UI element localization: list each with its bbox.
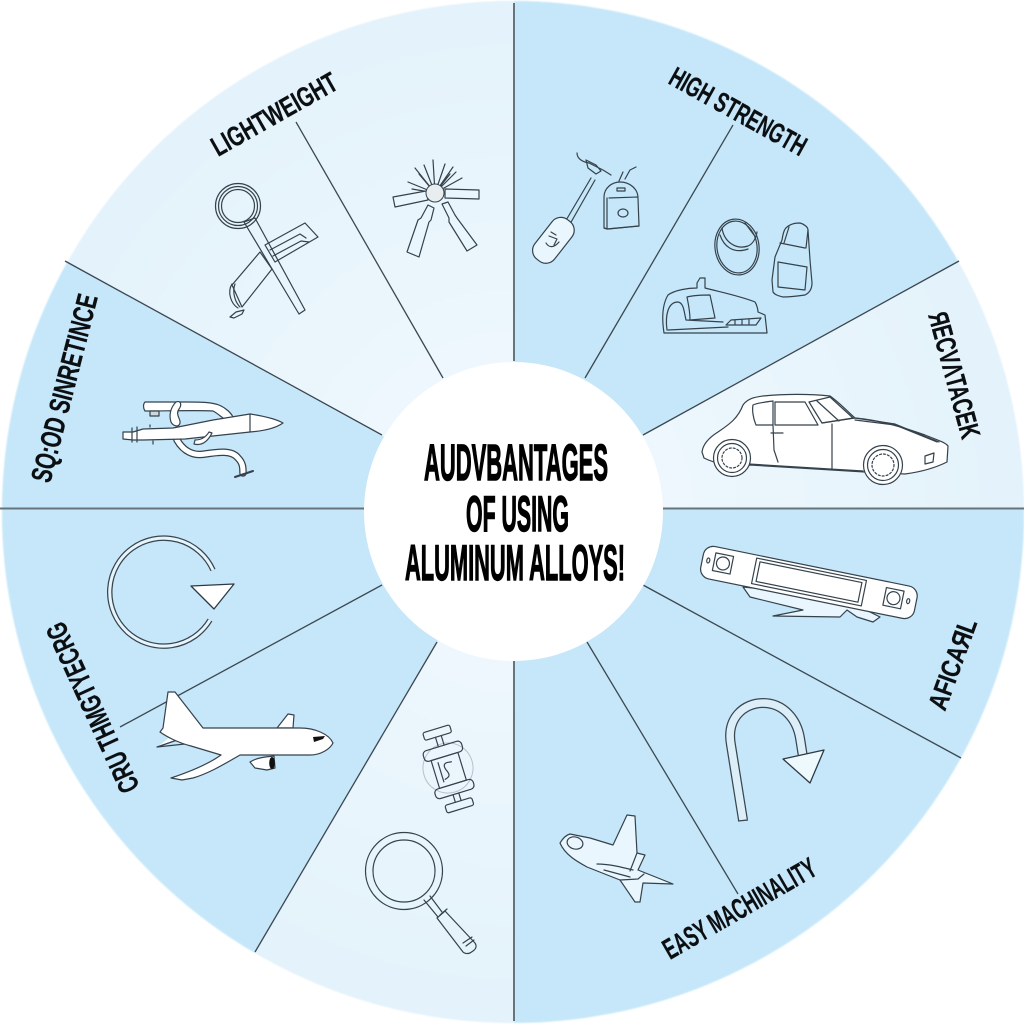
icon: u-turn arrow bbox=[730, 703, 824, 821]
label: lower left garbled: CRU THMGTYECRG bbox=[40, 617, 146, 797]
icon: bracket device bbox=[699, 545, 919, 622]
infographic wheel: ALUMINUM ALLOYS! bbox=[405, 535, 625, 591]
icon: magnifying glass bbox=[366, 832, 476, 954]
infographic wheel: AUDVBANTAGES bbox=[424, 434, 608, 491]
icon: ring and cross tool bbox=[216, 184, 318, 318]
icon: starburst with arms bbox=[393, 160, 479, 257]
label: easy machinability: EASY MACHINALITY bbox=[658, 852, 822, 966]
label: right lower garbled: AFICAЯL bbox=[922, 615, 983, 714]
centre circle bbox=[364, 362, 663, 661]
title: OF USING bbox=[466, 486, 569, 542]
icon: space shuttle bbox=[560, 815, 673, 902]
label: lightweight: LIGHTWEIGHT bbox=[206, 66, 343, 162]
icon: airplane bbox=[157, 692, 333, 780]
label: high strength: HIGH STRENGTH bbox=[664, 61, 812, 162]
icon: small bag bbox=[604, 167, 639, 229]
title bbox=[405, 434, 625, 591]
icon: tool with capsule bbox=[528, 153, 611, 268]
label: recyclable garbled: ЯECVΛTACEK bbox=[922, 308, 986, 442]
icon: sports car bbox=[702, 394, 948, 484]
icon: visor ring bbox=[711, 216, 763, 278]
label: left garbled: SQ:OD SINRETINCE bbox=[26, 291, 105, 486]
icon: circular arrow bbox=[110, 538, 234, 646]
icon: small vehicle bbox=[663, 278, 767, 333]
icon: left machine part bbox=[123, 402, 283, 477]
icon: bag outline bbox=[772, 223, 812, 297]
icon: clamp bbox=[412, 721, 484, 816]
